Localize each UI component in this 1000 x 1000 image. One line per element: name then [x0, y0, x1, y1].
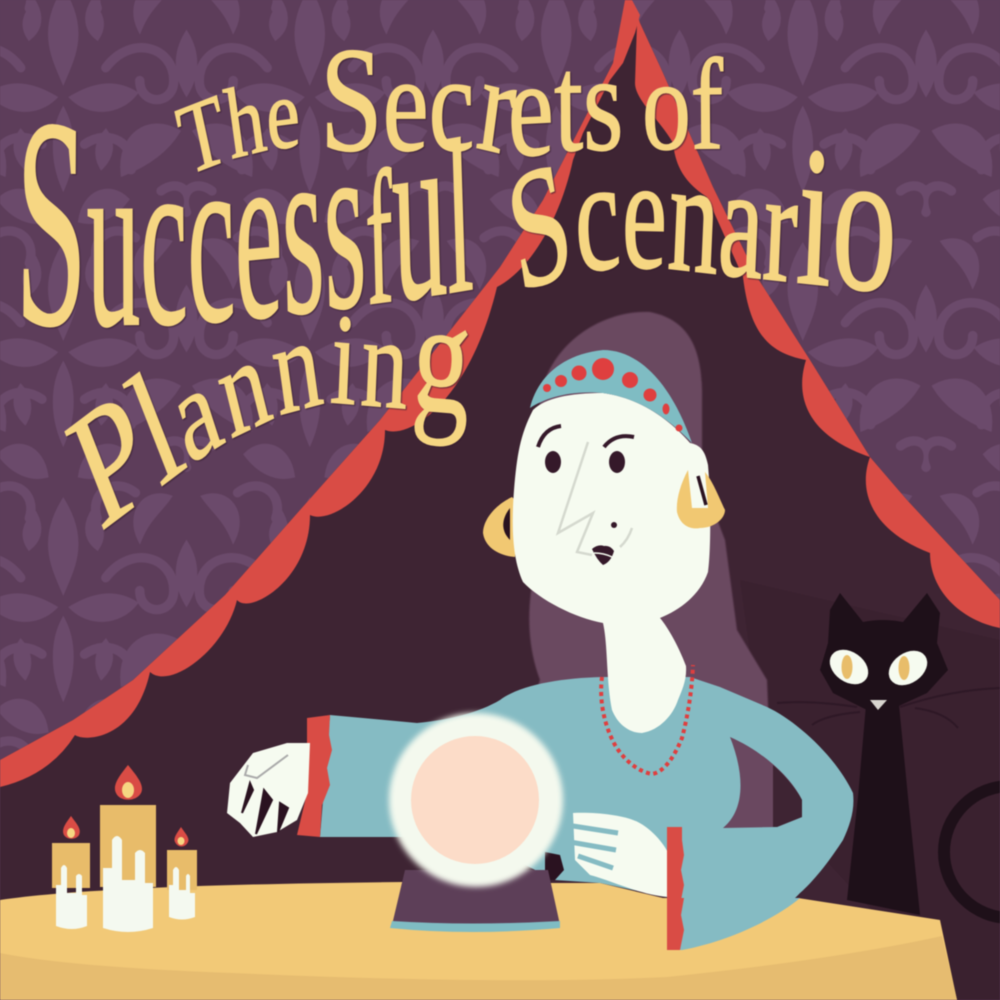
beauty mark and lips: [592, 522, 617, 565]
neck and face: [513, 393, 710, 733]
ball center: [411, 736, 539, 864]
necklace: [601, 665, 693, 774]
ball glow: [389, 713, 563, 887]
cat tail: [944, 786, 1000, 918]
fortune teller: [227, 350, 853, 950]
right earring: [677, 470, 725, 528]
left sleeve cuff: [297, 715, 332, 837]
large candle: [100, 765, 156, 932]
title: [22, 49, 894, 531]
title line: The Secrets of: [174, 49, 725, 173]
left hand: [227, 743, 310, 837]
cuff over table: [667, 898, 684, 950]
panel: right wall dark shading: [740, 580, 1000, 1000]
right red curtain: [632, 0, 1000, 628]
title line: Planning: Planning: [64, 316, 470, 531]
headband beads: [543, 358, 682, 432]
earring shadow: [503, 508, 510, 540]
dress over table: [667, 898, 800, 950]
cat eyes: [823, 643, 934, 692]
candles: [52, 765, 197, 932]
arm gap: [723, 737, 802, 828]
ball stand: [392, 870, 560, 925]
crystal ball: [389, 713, 563, 932]
eyes and brows: [538, 426, 634, 473]
title line: Successful: [22, 123, 474, 330]
right candle: [167, 827, 197, 920]
fortune teller hair: [529, 312, 772, 800]
headband: [530, 350, 692, 443]
cat body: [847, 705, 920, 915]
blue dress: [320, 677, 853, 950]
cat head: [820, 593, 948, 710]
arm gap shadow: [773, 765, 802, 827]
title line: Planning: [64, 316, 470, 531]
left red curtain: [0, 0, 640, 787]
cat whiskers: [777, 688, 1000, 728]
title line: The Secrets of: The Secrets of: [174, 49, 725, 173]
cat nose: [870, 700, 887, 710]
table front shade: [0, 936, 957, 1000]
right sleeve cuff: [667, 827, 684, 950]
black cat: [777, 593, 1000, 918]
right hand: [570, 813, 668, 897]
title line: Scenario: Scenario: [511, 150, 894, 294]
nose line: [558, 442, 632, 555]
title line: Scenario: [511, 150, 894, 294]
stand base strip: [390, 921, 560, 932]
left earring: [483, 497, 515, 557]
shadow behind ball: [545, 852, 564, 880]
round table: [0, 882, 957, 1000]
title line: Successful: Successful: [22, 123, 474, 330]
left candle: [52, 816, 90, 929]
